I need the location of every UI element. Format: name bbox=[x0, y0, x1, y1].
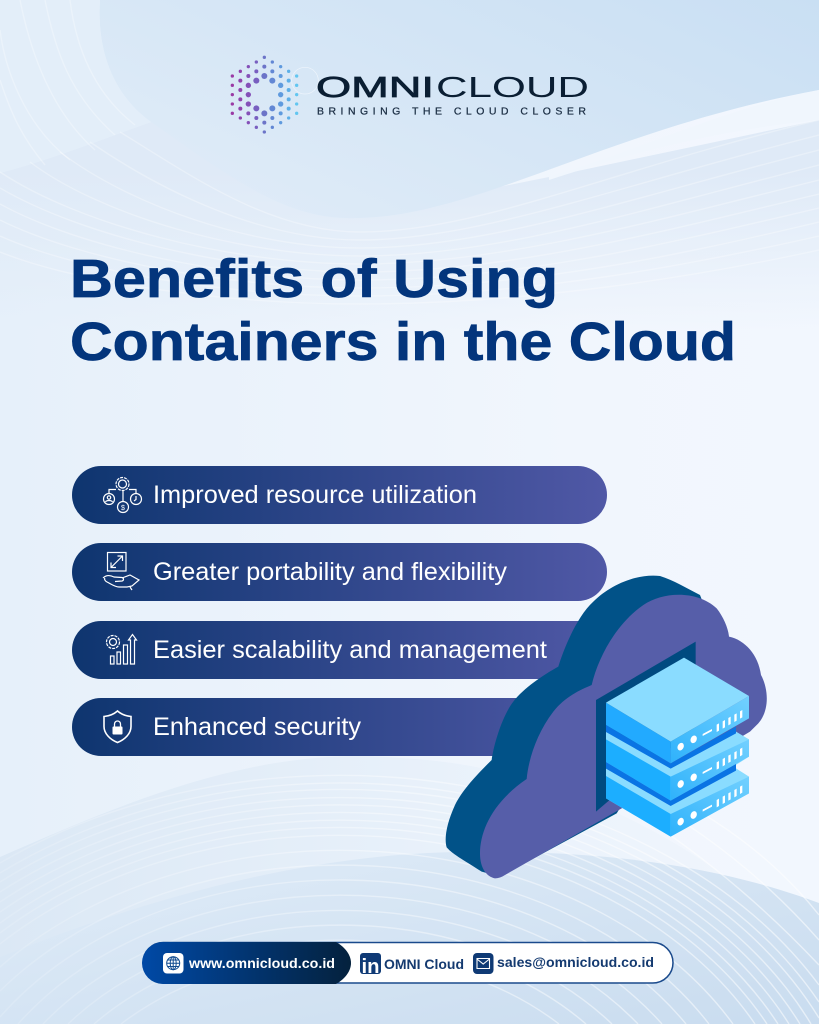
pill: easier scalability and management bbox=[72, 621, 607, 679]
pill: improved resource utilization: Improved resource utilization bbox=[153, 481, 477, 509]
server unit 3 bbox=[606, 768, 749, 837]
cloud back side bbox=[446, 576, 720, 877]
website pill: www.omnicloud.co.id bbox=[188, 956, 335, 971]
email: sales@omnicloud.co.id bbox=[497, 955, 654, 970]
email bbox=[473, 953, 654, 974]
logo tagline: BRINGING THE CLOUD CLOSER bbox=[317, 106, 586, 118]
linkedin: OMNI Cloud bbox=[384, 957, 464, 972]
icon: globe bbox=[163, 953, 184, 974]
pill: enhanced security: Enhanced security bbox=[153, 713, 361, 741]
linkedin: in bbox=[362, 956, 380, 978]
pill: greater portability and flexibility bbox=[72, 543, 607, 601]
server opening bbox=[596, 642, 696, 812]
title: Benefits of Using bbox=[70, 249, 558, 309]
illustration: isometric cloud with server bbox=[446, 576, 767, 878]
server unit 2 bbox=[606, 732, 749, 806]
pill: greater portability and flexibility: Greater portability and flexibility bbox=[153, 558, 507, 586]
title: Containers in the Cloud bbox=[70, 312, 736, 372]
benefits list bbox=[72, 466, 607, 756]
pill: easier scalability and management: Easier scalability and management bbox=[153, 636, 547, 664]
server stack bbox=[606, 658, 749, 837]
linkedin bbox=[360, 953, 464, 978]
icon: shield with lock bbox=[104, 711, 131, 742]
cloud front face bbox=[480, 595, 767, 878]
logo wordmark: OMNI bbox=[316, 72, 434, 104]
logo: CLOUD bbox=[436, 72, 589, 104]
icon: gear and growth bars bbox=[106, 634, 136, 664]
pill: enhanced security bbox=[72, 698, 607, 756]
icon: gear with resources bbox=[104, 478, 142, 512]
logo bbox=[231, 56, 589, 134]
pill: improved resource utilization bbox=[72, 466, 607, 524]
title bbox=[70, 249, 736, 372]
logo icon: dotted hexagon bbox=[231, 56, 318, 134]
icon: hand holding resize box bbox=[103, 552, 139, 590]
server unit 1 bbox=[606, 658, 749, 769]
footer contact bar bbox=[142, 942, 673, 984]
pill: improved resource utilization: $ bbox=[121, 505, 125, 512]
website pill bbox=[142, 942, 351, 984]
